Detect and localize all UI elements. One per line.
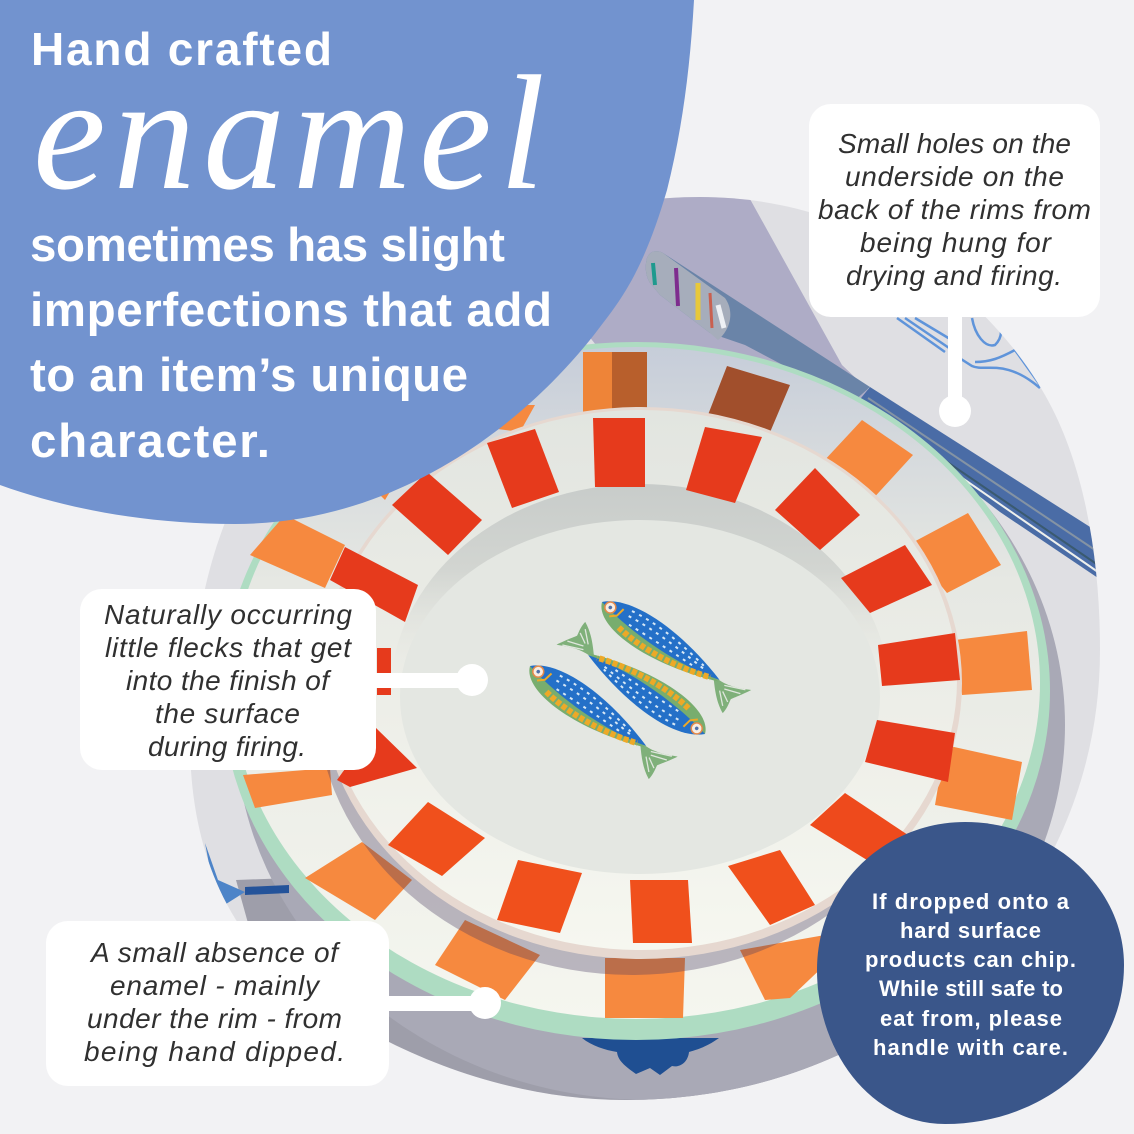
callout: small holes: drying and firing.: [846, 260, 1062, 291]
callout: small holes: back of the rims from: [818, 194, 1091, 225]
fish: lower left sardine: [529, 665, 678, 779]
callout: flecks: [80, 589, 488, 770]
text block: imperfections statement: imperfections that add: [30, 284, 552, 337]
tablecloth embroidery: [897, 318, 1040, 388]
fish: upper right sardine: [601, 601, 751, 713]
callout: flecks: the surface: [155, 698, 300, 729]
outer plate: [222, 342, 1050, 1040]
callout: small holes: being hung for: [860, 227, 1053, 258]
callout: chip warning blob: handle with care.: [873, 1035, 1068, 1060]
knife: [646, 251, 1098, 578]
callout: small holes: [809, 104, 1100, 427]
inner plate: [320, 407, 962, 959]
text block: imperfections statement: character.: [30, 415, 270, 468]
callout: small holes: Small holes on the: [838, 128, 1071, 159]
callout: chip warning blob: If dropped onto a: [872, 889, 1070, 914]
callout: absence of enamel: being hand dipped.: [84, 1036, 345, 1067]
callout: chip warning blob: hard surface: [900, 918, 1041, 943]
inner plate red stripes: [330, 418, 960, 943]
callout: small holes: underside on the: [845, 161, 1064, 192]
callout: flecks: into the finish of: [126, 665, 332, 696]
callout: chip warning blob: products can chip.: [865, 947, 1076, 972]
callout: flecks: little flecks that get: [105, 632, 352, 663]
callout: chip warning blob: While still safe to: [879, 976, 1063, 1001]
callout: absence of enamel: [46, 921, 501, 1086]
callout: flecks: during firing.: [148, 731, 306, 762]
text block: imperfections statement: to an item’s unique: [30, 349, 468, 402]
callout: chip warning blob: [817, 822, 1124, 1124]
text block: imperfections statement: [30, 219, 552, 468]
callout: flecks: Naturally occurring: [104, 599, 352, 630]
fish: middle sardine: [556, 622, 706, 735]
text block: imperfections statement: sometimes has slight: [30, 219, 505, 272]
callout: absence of enamel: enamel - mainly: [110, 970, 321, 1001]
panel: headline blob: [0, 0, 694, 524]
heading: enamel: enamel: [33, 43, 545, 224]
plate well: [400, 520, 880, 874]
callout: chip warning blob: eat from, please: [880, 1006, 1062, 1031]
inner plate shadow: [327, 770, 832, 975]
callout: absence of enamel: A small absence of: [89, 937, 341, 968]
callout: absence of enamel: under the rim - from: [87, 1003, 342, 1034]
outer plate orange stripes: [243, 352, 1032, 1018]
photo: enamel plates on a tablecloth: [180, 190, 1110, 1110]
heading: Hand crafted: Hand crafted: [31, 23, 332, 75]
